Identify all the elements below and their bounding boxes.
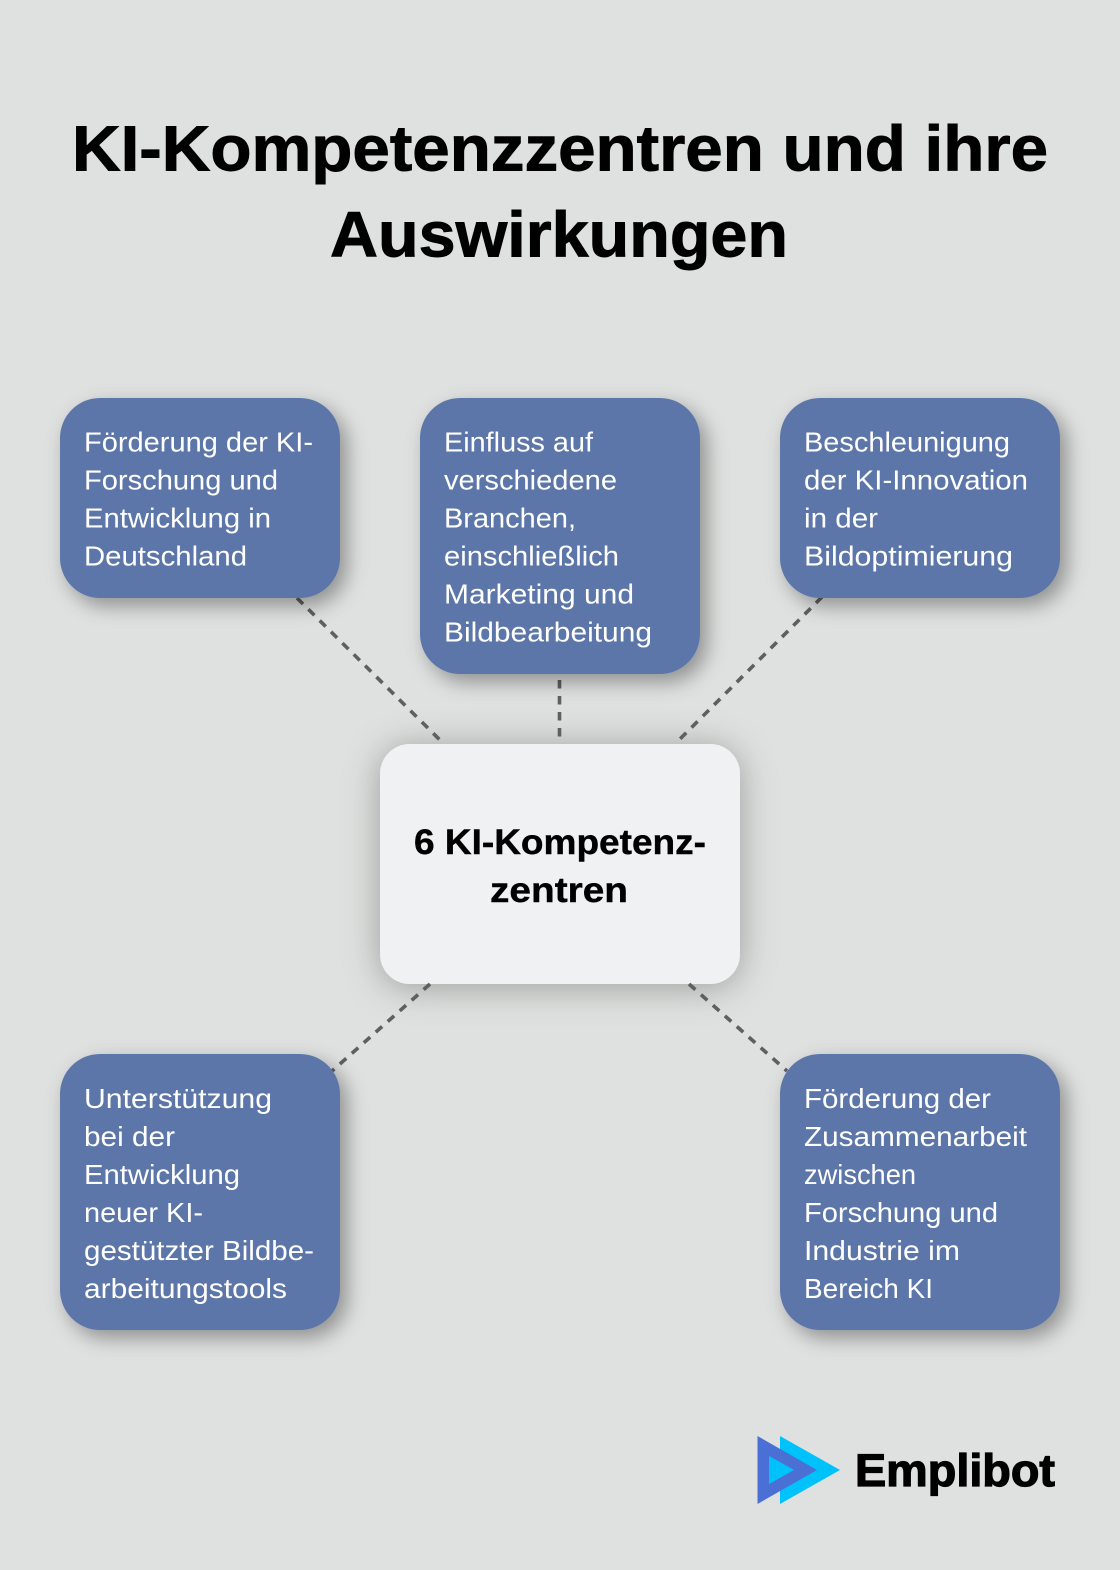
panel: Förderung der Zusammenarbeit: Bereich KI bbox=[804, 1273, 933, 1304]
panel: Einfluss auf Branchen bbox=[420, 398, 700, 674]
panel: Beschleunigung der KI-Innovation: in der bbox=[804, 502, 878, 534]
panel: Einfluss auf Branchen: verschiedene bbox=[444, 464, 617, 496]
panel: Einfluss auf Branchen: Branchen, bbox=[444, 502, 576, 534]
panel: centre topic bbox=[380, 744, 740, 984]
panel: Förderung der KI-Forschung: Förderung der KI- bbox=[84, 426, 313, 458]
connector: top right card to centre bbox=[675, 597, 822, 744]
panel: Beschleunigung der KI-Innovation: der KI-Innovation bbox=[804, 464, 1028, 496]
panel: Förderung der Zusammenarbeit: Industrie im bbox=[804, 1235, 960, 1266]
panel: Unterstützung Bildbearbeitungstools: bei der bbox=[84, 1121, 175, 1152]
panel: Einfluss auf Branchen: Bildbearbeitung bbox=[444, 616, 652, 648]
panel: Unterstützung Bildbearbeitungstools: Entwicklung bbox=[84, 1159, 240, 1190]
panel: Unterstützung Bildbearbeitungstools: Unterstützung bbox=[84, 1083, 272, 1114]
panel: Förderung der KI-Forschung: Entwicklung in bbox=[84, 502, 271, 534]
panel: Einfluss auf Branchen: Einfluss auf bbox=[444, 426, 593, 458]
panel: Förderung der Zusammenarbeit: Forschung und bbox=[804, 1197, 998, 1228]
panel: Förderung der KI-Forschung: Forschung und bbox=[84, 464, 278, 496]
connector: bottom right card to centre bbox=[689, 984, 787, 1071]
panel: centre topic: zentren bbox=[490, 871, 628, 910]
connector: bottom left card to centre bbox=[332, 984, 430, 1071]
panel: Unterstützung Bildbearbeitungstools bbox=[60, 1054, 340, 1330]
connector: top left card to centre bbox=[297, 598, 444, 744]
title: Auswirkungen bbox=[330, 198, 788, 270]
panel: Förderung der Zusammenarbeit: Förderung der bbox=[804, 1083, 991, 1114]
panel: centre topic: 6 KI-Kompetenz- bbox=[414, 823, 706, 862]
panel: Förderung der Zusammenarbeit bbox=[780, 1054, 1060, 1330]
panel: Unterstützung Bildbearbeitungstools: gestützter Bildbe- bbox=[84, 1235, 314, 1266]
logo: Emplibot bbox=[758, 1436, 1055, 1504]
title: KI-Kompetenzzentren und ihre bbox=[72, 112, 1048, 184]
panel: Einfluss auf Branchen: Marketing und bbox=[444, 578, 634, 610]
panel: Förderung der Zusammenarbeit: Zusammenarbeit bbox=[804, 1121, 1027, 1152]
logo: Emplibot: Emplibot bbox=[855, 1445, 1055, 1496]
title bbox=[72, 112, 1048, 270]
panel: Förderung der Zusammenarbeit: zwischen bbox=[804, 1159, 916, 1190]
connector: top middle card to centre bbox=[558, 680, 561, 737]
panel: Förderung der KI-Forschung: Deutschland bbox=[84, 540, 247, 572]
panel: Beschleunigung der KI-Innovation: Beschleunigung bbox=[804, 426, 1010, 458]
panel: Förderung der KI-Forschung bbox=[60, 398, 340, 598]
panel: Unterstützung Bildbearbeitungstools: neuer KI- bbox=[84, 1197, 203, 1228]
panel: Einfluss auf Branchen: einschließlich bbox=[444, 540, 619, 572]
panel: Unterstützung Bildbearbeitungstools: arbeitungstools bbox=[84, 1273, 287, 1304]
panel: Beschleunigung der KI-Innovation: Bildoptimierung bbox=[804, 540, 1013, 572]
panel: Beschleunigung der KI-Innovation bbox=[780, 398, 1060, 598]
